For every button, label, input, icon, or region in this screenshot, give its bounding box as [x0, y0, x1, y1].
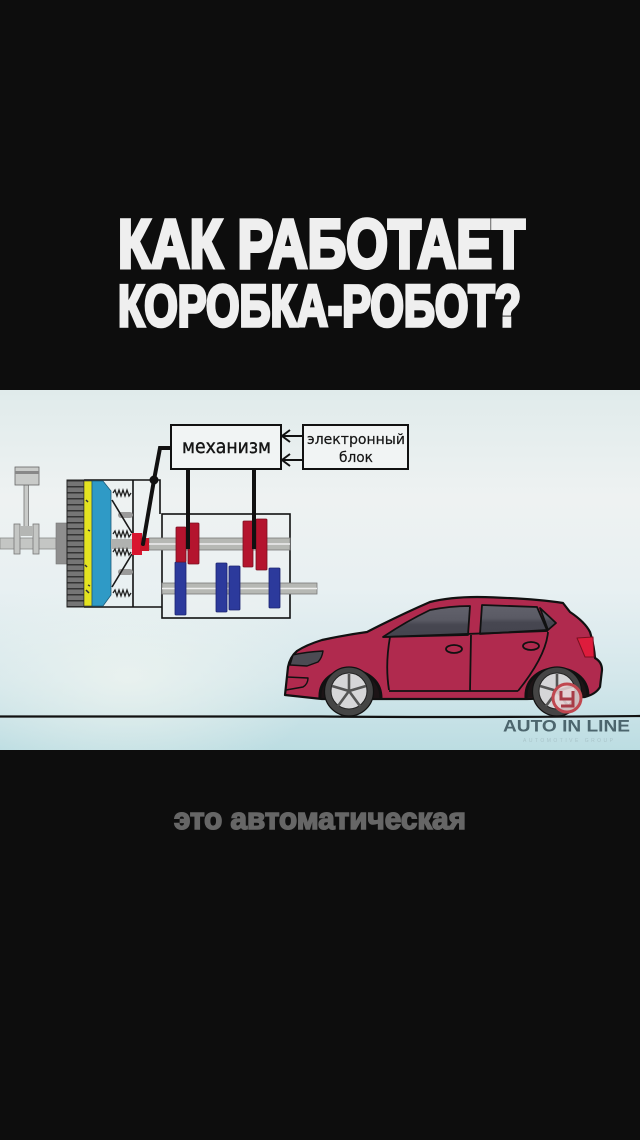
- gearbox housing: [162, 514, 290, 618]
- watermark logo: [503, 684, 630, 744]
- title: КАК РАБОТАЕТ: [118, 206, 525, 282]
- tail light: [577, 637, 594, 657]
- arrows: electronic unit to mechanism: [282, 430, 303, 466]
- headlight: [290, 651, 323, 666]
- red gears: [176, 519, 267, 570]
- caption: это автоматическая: [174, 801, 466, 836]
- front wheel: [324, 667, 374, 716]
- engine: piston and crankshaft: [0, 467, 56, 554]
- box: mechanism: механизм: [182, 437, 271, 458]
- car windows: [383, 605, 556, 637]
- box: electronic unit: блок: [339, 450, 373, 466]
- logo tagline: AUTOMOTIVE GROUP: [523, 738, 614, 744]
- box: electronic unit: электронный: [307, 432, 405, 448]
- red clutch fork collar: [132, 533, 149, 555]
- shafts: [149, 538, 317, 594]
- car body: [285, 597, 602, 699]
- logo badge: [553, 684, 581, 712]
- wheel arches: [320, 668, 588, 698]
- rear wheel: [532, 667, 582, 716]
- box: electronic unit: [303, 425, 408, 469]
- blue gears: [175, 562, 280, 615]
- title: [118, 206, 525, 339]
- grille: [286, 677, 308, 690]
- car door lines: [383, 631, 548, 691]
- actuator lever and rods: [143, 448, 254, 549]
- door handles: [446, 642, 539, 653]
- car: [285, 597, 602, 716]
- clutch assembly: [56, 480, 162, 607]
- logo wordmark: AUTO IN LINE: [503, 716, 630, 736]
- illustration panel: [0, 390, 640, 750]
- box: mechanism: [171, 425, 281, 469]
- ground line: [0, 716, 640, 717]
